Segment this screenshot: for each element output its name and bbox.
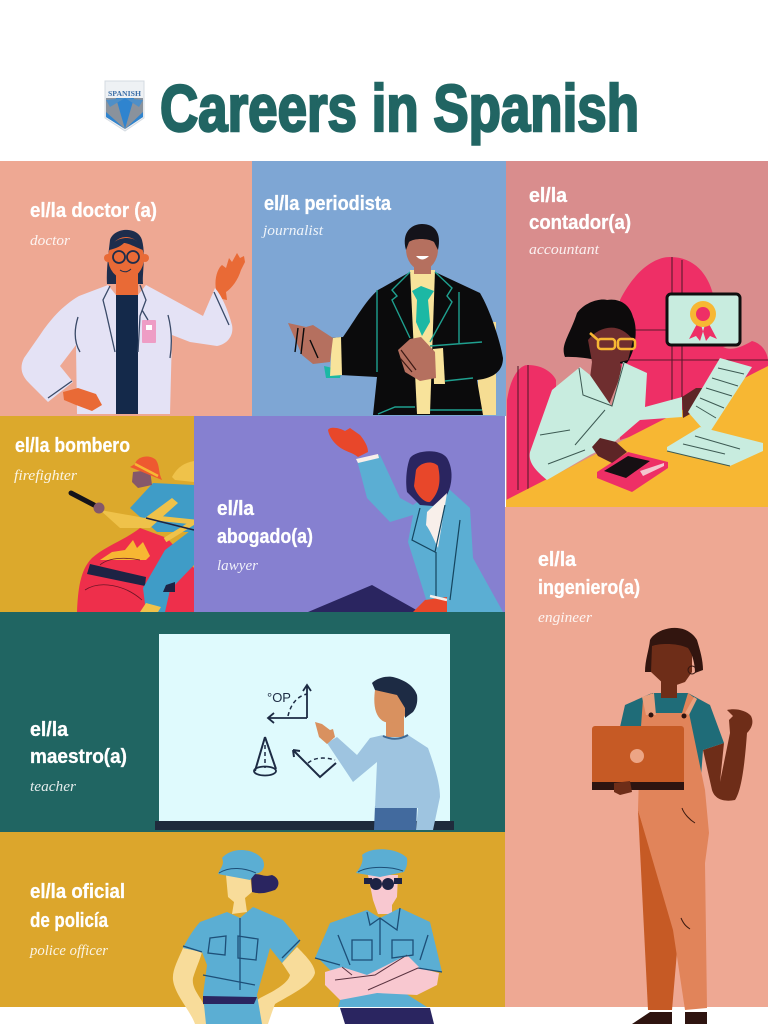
heading: el/la ingeniero(a): el/la xyxy=(538,549,577,571)
panel: teacher xyxy=(0,612,505,832)
logo: Spanish academy shield xyxy=(105,81,144,131)
panel: accountant xyxy=(506,161,768,508)
illustration: policewoman xyxy=(173,850,315,1024)
translation: lawyer: lawyer xyxy=(217,558,258,574)
heading: el/la abogado(a): el/la xyxy=(217,498,255,520)
heading: el/la oficial de policía: el/la oficial xyxy=(30,881,125,903)
icon: framed award xyxy=(667,294,740,345)
illustration: policeman xyxy=(315,849,442,1024)
translation: firefighter: firefighter xyxy=(14,468,77,484)
heading: el/la oficial de policía xyxy=(30,881,125,932)
illustration: lawyer xyxy=(308,428,503,612)
translation: engineer: engineer xyxy=(538,610,592,626)
heading: el/la maestro(a): maestro(a) xyxy=(30,746,127,768)
heading: el/la ingeniero(a) xyxy=(538,549,640,599)
panel: journalist xyxy=(252,161,506,416)
heading: el/la contador(a) xyxy=(529,185,631,234)
panel: doctor xyxy=(0,161,252,416)
whiteboard drawings xyxy=(254,685,336,777)
translation: accountant: accountant xyxy=(529,242,600,258)
translation: teacher: teacher xyxy=(30,779,76,795)
whiteboard xyxy=(155,634,454,830)
panel: engineer xyxy=(505,507,768,1024)
heading: el/la doctor: el/la doctor (a) xyxy=(30,200,157,222)
heading: el/la abogado(a) xyxy=(217,498,313,548)
heading: el/la contador(a): contador(a) xyxy=(529,212,631,234)
logo: Spanish academy shield: SPANISH xyxy=(108,90,142,98)
translation: police officer: police officer xyxy=(29,943,108,959)
illustration: doctor xyxy=(22,230,245,414)
heading: el/la maestro(a) xyxy=(30,719,127,768)
illustration: engineer xyxy=(592,628,752,1024)
heading: el/la bombero: el/la bombero xyxy=(15,435,130,457)
panel: firefighter xyxy=(0,416,194,612)
panel: lawyer xyxy=(194,416,505,612)
panel: police officer xyxy=(0,832,505,1024)
heading: el/la oficial de policía: de policía xyxy=(30,910,109,932)
title: Careers in Spanish xyxy=(160,71,639,145)
heading: el/la ingeniero(a): ingeniero(a) xyxy=(538,577,640,599)
translation: doctor: doctor xyxy=(30,233,70,249)
illustration: journalist xyxy=(288,224,503,415)
heading: el/la contador(a): el/la xyxy=(529,185,568,207)
heading: el/la abogado(a): abogado(a) xyxy=(217,526,313,548)
heading: el/la maestro(a): el/la xyxy=(30,719,69,741)
whiteboard drawings: °OP xyxy=(267,690,291,705)
translation: journalist: journalist xyxy=(261,223,324,239)
heading: el/la periodista: el/la periodista xyxy=(264,193,392,215)
illustration: firefighter xyxy=(71,457,194,612)
illustration: teacher xyxy=(315,677,440,830)
illustration: accountant xyxy=(506,257,768,507)
